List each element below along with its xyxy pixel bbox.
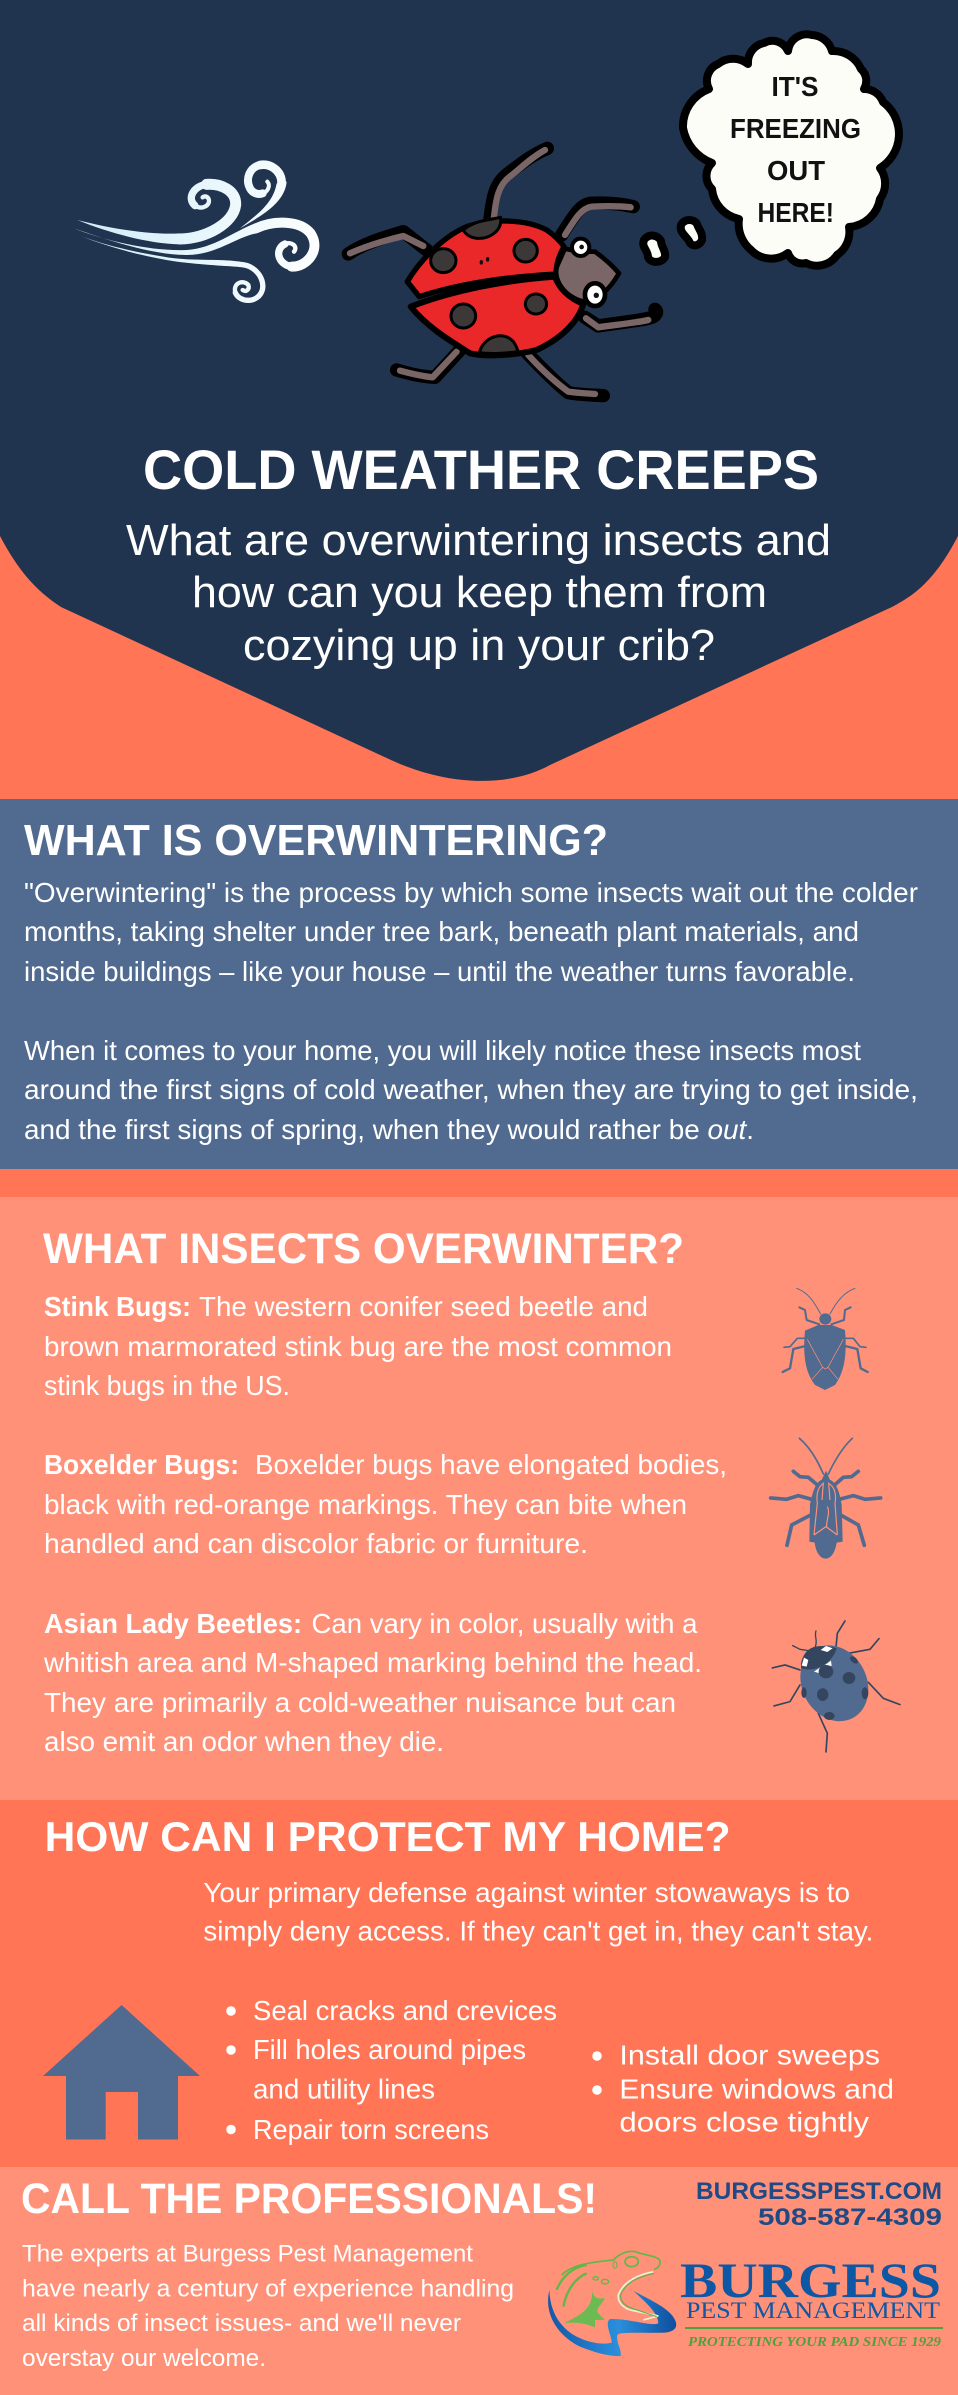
text: asian lady beetles: They are primarily a cold-weather nuisance but can bbox=[44, 1687, 676, 1718]
text: asian lady beetles: whitish area and M-shaped marking behind the head. bbox=[43, 1647, 702, 1678]
body text: overstay our welcome. bbox=[22, 2345, 266, 2372]
heading: CALL THE PROFESSIONALS! bbox=[21, 2175, 597, 2223]
cloud text: OUT bbox=[767, 155, 825, 186]
list: left: Seal cracks and crevices bbox=[253, 1995, 557, 2026]
body text: have nearly a century of experience handling bbox=[22, 2276, 514, 2303]
text: stink bugs: Stink Bugs: bbox=[44, 1291, 191, 1322]
text: boxelder bugs: Boxelder bugs have elongated bodies, bbox=[255, 1449, 727, 1480]
heading: WHAT INSECTS OVERWINTER? bbox=[43, 1225, 684, 1273]
text: stink bugs bbox=[44, 1291, 672, 1401]
cloud text: FREEZING bbox=[730, 113, 861, 144]
icon: stink bug bbox=[783, 1288, 868, 1390]
panel: how can i protect my home bbox=[0, 1800, 958, 2167]
icon: wind swirl bbox=[74, 165, 314, 300]
heading: HOW CAN I PROTECT MY HOME? bbox=[45, 1813, 731, 1860]
body text: around the first signs of cold weather, when they are trying to get inside, bbox=[24, 1074, 918, 1105]
body text: inside buildings – like your house – until the weather turns favorable. bbox=[24, 956, 855, 987]
list: right: doors close tightly bbox=[619, 2106, 869, 2137]
list: right: Ensure windows and bbox=[619, 2074, 894, 2105]
subtitle: What are overwintering insects and bbox=[126, 516, 831, 565]
list: left: Repair torn screens bbox=[253, 2114, 489, 2145]
text: stink bugs: stink bugs in the US. bbox=[44, 1370, 290, 1401]
thought cloud bbox=[683, 34, 899, 266]
logo: burgess pest management: PEST MANAGEMENT bbox=[686, 2298, 940, 2323]
contact details bbox=[696, 2178, 942, 2231]
text: boxelder bugs: Boxelder Bugs: bbox=[44, 1449, 239, 1480]
body text: When it comes to your home, you will likely notice these insects most bbox=[24, 1035, 861, 1066]
contact details: 508-587-4309 bbox=[758, 2204, 942, 2231]
logo: burgess pest management: PROTECTING YOUR PAD SINCE 1929 bbox=[688, 2335, 941, 2350]
logo: burgess pest management bbox=[548, 2251, 943, 2356]
subtitle bbox=[126, 516, 831, 670]
text: stink bugs: The western conifer seed beetle and bbox=[199, 1291, 648, 1322]
icon: thought bubbles bbox=[643, 220, 702, 262]
text: boxelder bugs bbox=[44, 1449, 727, 1559]
list: left bbox=[226, 1995, 557, 2145]
body text: "Overwintering" is the process by which some insects wait out the colder bbox=[24, 877, 918, 908]
body text bbox=[22, 2240, 514, 2372]
body text: and the first signs of spring, when they would rather be out. bbox=[24, 1114, 754, 1145]
subtitle: cozying up in your crib? bbox=[243, 621, 715, 670]
cloud text: HERE! bbox=[758, 197, 834, 228]
list: right bbox=[592, 2040, 894, 2137]
icon: asian lady beetle bbox=[772, 1621, 900, 1752]
title: COLD WEATHER CREEPS bbox=[143, 438, 819, 501]
hero banner bbox=[0, 0, 958, 781]
text: asian lady beetles: Can vary in color, usually with a bbox=[312, 1608, 698, 1639]
intro text: simply deny access. If they can't get in, they can't stay. bbox=[203, 1916, 873, 1946]
body text: months, taking shelter under tree bark, beneath plant materials, and bbox=[24, 916, 859, 947]
cloud text bbox=[730, 71, 861, 228]
text: boxelder bugs: black with red-orange markings. They can bite when bbox=[44, 1489, 687, 1520]
text: stink bugs: brown marmorated stink bug are the most common bbox=[44, 1331, 672, 1362]
logo wordmark: BURGESS bbox=[680, 2252, 941, 2308]
text: boxelder bugs: handled and can discolor fabric or furniture. bbox=[44, 1528, 588, 1559]
contact details: BURGESSPEST.COM bbox=[696, 2178, 942, 2205]
body text: all kinds of insect issues- and we'll never bbox=[22, 2310, 461, 2337]
list: left: and utility lines bbox=[253, 2074, 435, 2105]
subtitle: how can you keep them from bbox=[192, 568, 767, 617]
panel: what is overwintering bbox=[0, 799, 958, 1169]
text: asian lady beetles: Asian Lady Beetles: bbox=[44, 1608, 302, 1639]
icon: cartoon ladybug bbox=[348, 148, 657, 396]
body text bbox=[24, 877, 918, 1145]
icon: house bbox=[43, 2005, 200, 2140]
heading: WHAT IS OVERWINTERING? bbox=[24, 816, 608, 865]
text: asian lady beetles bbox=[43, 1608, 702, 1757]
icon: boxelder bug bbox=[771, 1438, 881, 1559]
panel: call the professionals bbox=[0, 2167, 958, 2395]
cloud text: IT'S bbox=[772, 71, 818, 102]
text: asian lady beetles: also emit an odor when they die. bbox=[44, 1726, 444, 1757]
intro text: Your primary defense against winter stowaways is to bbox=[203, 1877, 850, 1908]
logo mark: frog bbox=[548, 2251, 676, 2356]
list: left: Fill holes around pipes bbox=[253, 2034, 526, 2065]
panel: what insects overwinter bbox=[0, 1197, 958, 1800]
body text: The experts at Burgess Pest Management bbox=[22, 2240, 473, 2268]
intro text bbox=[203, 1877, 873, 1946]
list: right: Install door sweeps bbox=[619, 2040, 880, 2071]
